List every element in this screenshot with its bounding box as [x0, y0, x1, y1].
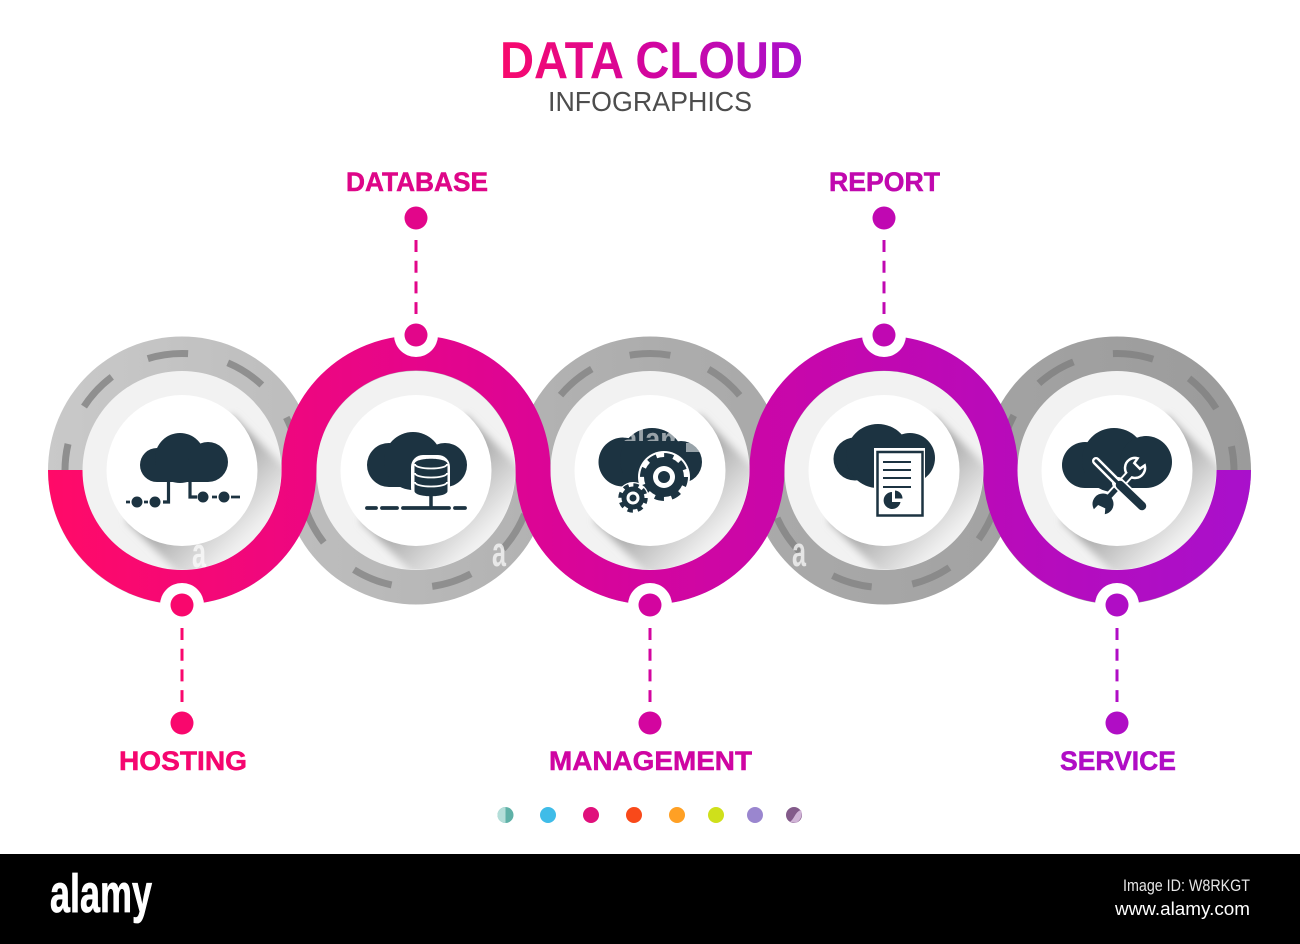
icon: cloud report document	[834, 424, 935, 518]
inner discs with long shadows	[82, 371, 1270, 624]
image id: Image ID: W8RKGT	[1123, 876, 1250, 895]
ring 2	[264, 318, 568, 623]
icon: cloud hosting network	[126, 433, 240, 508]
s-curve ribbon	[66, 353, 1234, 587]
icon: cloud gears	[598, 421, 702, 514]
ring 5	[983, 336, 1251, 604]
ring 4	[739, 326, 1029, 615]
watermark fragments: a	[792, 528, 806, 575]
website: www.alamy.com	[1114, 899, 1250, 919]
title	[500, 32, 803, 117]
label: service: SERVICE	[1060, 746, 1176, 776]
connector: management	[628, 583, 672, 734]
ring 3	[514, 335, 786, 606]
colour palette dots	[498, 807, 802, 823]
connector: report	[862, 206, 906, 357]
watermark fragments: a	[492, 528, 506, 575]
watermark fragments	[192, 528, 806, 576]
connector: service	[1095, 583, 1139, 734]
icon: cloud service tools	[1062, 428, 1172, 514]
ring 1	[36, 324, 328, 617]
grey dashed rings	[36, 318, 1251, 623]
footer logo: alamy	[50, 864, 152, 924]
label: database: DATABASE	[346, 167, 488, 197]
icon: cloud database	[367, 432, 467, 508]
subheading: infographics: INFOGRAPHICS	[548, 86, 752, 117]
label: management: MANAGEMENT	[549, 746, 753, 776]
watermark fragments: a	[192, 529, 206, 576]
label: report: REPORT	[829, 167, 940, 197]
icon: cloud gears: alamy	[622, 421, 700, 457]
heading: data cloud: DATA CLOUD	[500, 32, 803, 90]
connector: hosting	[160, 583, 204, 734]
label: hosting: HOSTING	[119, 746, 247, 776]
connector: database	[394, 206, 438, 357]
footer bar	[0, 854, 1300, 944]
